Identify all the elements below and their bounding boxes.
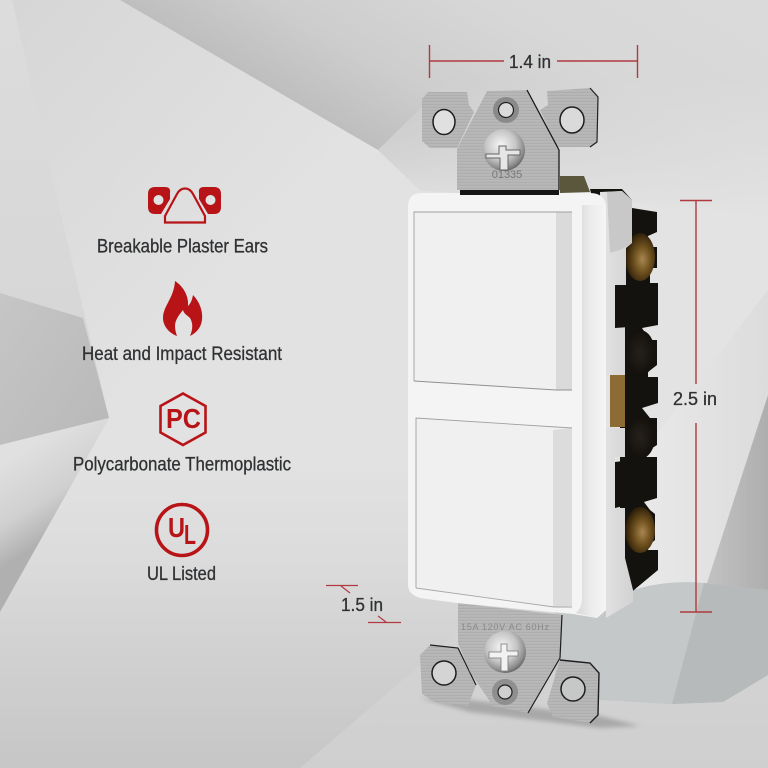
black screw: upper middle: [625, 330, 655, 376]
brass terminal screw: bottom: [625, 507, 655, 553]
bottom mounting strap: [420, 603, 599, 723]
black screw: lower middle: [625, 415, 655, 459]
label: Polycarbonate Thermoplastic: Polycarbonate Thermoplastic: [73, 454, 291, 476]
top mounting strap: [422, 88, 598, 190]
icon: breakable plaster ears: [148, 187, 221, 222]
rear terminal tab: [560, 176, 590, 193]
label: Heat and Impact Resistant: Heat and Impact Resistant: [82, 343, 282, 365]
brass strap between terminals: [610, 375, 625, 427]
icon: PC hexagon: PC: [166, 403, 201, 434]
wall shadow darker part: [672, 583, 768, 704]
side wall upper shade: [607, 191, 632, 253]
black block upper: [615, 285, 658, 328]
wall shadow behind switch: [555, 582, 768, 704]
black rear housing: [590, 189, 658, 600]
dimension: height 2.5 in: 2.5 in: [673, 389, 717, 409]
top strap shadow on frame: [460, 190, 559, 195]
dimension: depth 1.5 in: 1.5 in: [341, 595, 383, 615]
icon: UL circle: L: [184, 519, 196, 550]
icon: UL circle: U: [168, 512, 185, 543]
icon: UL circle: [156, 504, 208, 556]
dimension: width 1.4 in: [430, 45, 638, 78]
icon: flame: [163, 281, 202, 336]
icon: PC hexagon: [160, 394, 206, 445]
top mounting strap: 01335: [492, 169, 522, 181]
bottom mounting strap: 15A 120V AC 60Hz: [461, 622, 550, 632]
switch product: [408, 88, 658, 723]
label: Breakable Plaster Ears: Breakable Plaster Ears: [97, 236, 268, 258]
brass terminal screw: top: [625, 233, 655, 281]
dimension: height 2.5 in: [673, 200, 717, 612]
bottom rocker: [416, 418, 572, 607]
dimension: depth 1.5 in: [326, 586, 401, 622]
black block beside brass strap: [625, 377, 658, 403]
black block lower: [615, 457, 657, 508]
side wall of frame: [600, 191, 633, 618]
dimension: width 1.4 in: 1.4 in: [509, 52, 551, 72]
top rocker: [414, 212, 572, 390]
floor shadow under bottom strap: [420, 698, 640, 728]
white frame: [408, 193, 606, 618]
label: UL Listed: UL Listed: [147, 563, 216, 585]
frame channel: [576, 205, 606, 618]
